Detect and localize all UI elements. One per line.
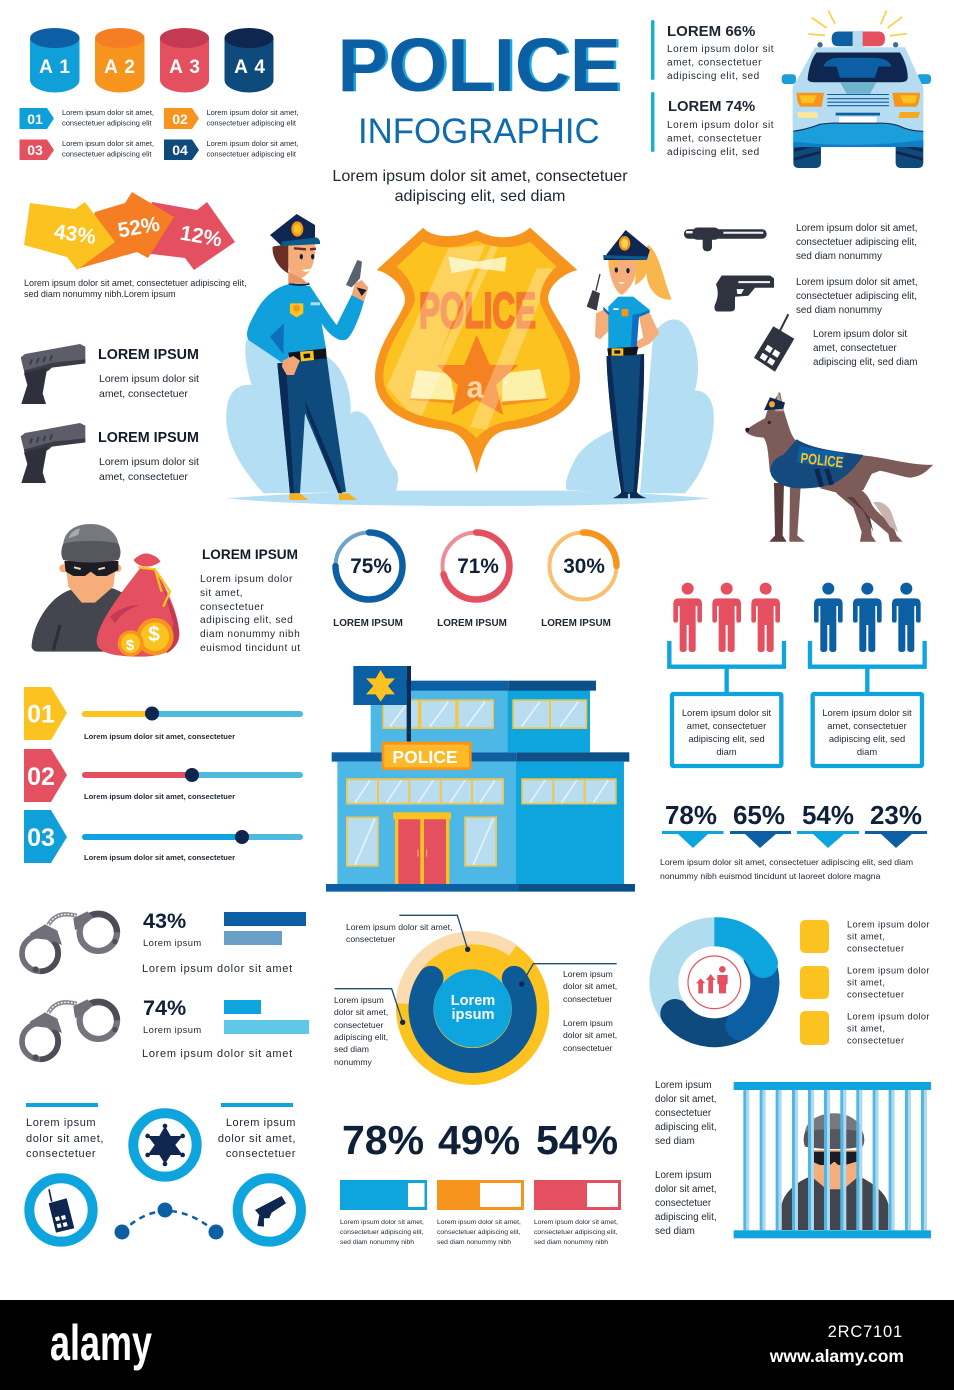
slider 02: Lorem ipsum dolor sit amet, consectetuer — [84, 792, 235, 801]
subtitle infographic: INFOGRAPHIC — [358, 112, 600, 151]
people box text: Lorem ipsum dolor sit — [822, 708, 912, 718]
jail text: consectetuer — [655, 1198, 712, 1209]
thief with money bag: $ — [126, 637, 135, 654]
ring diagram: dolor sit amet, — [563, 1030, 617, 1040]
percent bars bottom: Lorem ipsum dolor sit amet, — [340, 1219, 424, 1226]
numbered sliders — [24, 687, 303, 863]
handcuffs stats: 43% — [143, 908, 186, 933]
legend item 01: Lorem ipsum dolor sit amet, — [62, 108, 154, 117]
people groups — [669, 583, 925, 766]
ring diagram: consectetuer — [563, 994, 613, 1004]
intro text: adipiscing elit, sed diam — [395, 187, 565, 205]
icon: handcuffs 2 — [22, 999, 118, 1060]
handcuffs stats: Lorem ipsum — [143, 1024, 202, 1035]
thief with money bag — [32, 524, 179, 657]
legend item 04: 04 — [172, 142, 188, 158]
jail text: dolor sit amet, — [655, 1184, 717, 1195]
donut legend: Lorem ipsum dolor — [847, 920, 930, 930]
ring 30 percent — [541, 532, 616, 629]
arrows 43 52 12 percent — [24, 192, 235, 270]
police shield badge: a — [466, 370, 484, 404]
male officer — [247, 214, 368, 500]
icon: pistol 1 — [21, 344, 85, 404]
jail text: Lorem ipsum — [655, 1080, 712, 1091]
percent markers row: 78% — [665, 800, 717, 830]
ring diagram: ipsum — [452, 1007, 495, 1023]
icon circles with dotted path: dolor sit amet, — [218, 1133, 296, 1145]
percent markers row: 54% — [802, 800, 854, 830]
blue people — [814, 583, 921, 652]
ring 75 percent: 75% — [350, 555, 392, 578]
cylinder A4: A 4 — [234, 57, 266, 78]
jail text: sed diam — [655, 1136, 695, 1147]
donut legend: sit amet, — [847, 1024, 885, 1034]
dotted path — [114, 1202, 224, 1240]
percent bars bottom: Lorem ipsum dolor sit amet, — [437, 1219, 521, 1226]
thief text: adipiscing elit, sed — [200, 615, 293, 626]
cage bars — [734, 1082, 931, 1238]
weapon list right: Lorem ipsum dolor sit amet, — [796, 223, 917, 234]
icon: gun — [238, 1178, 301, 1242]
people box text: diam — [857, 747, 877, 757]
icon: pistol 2 — [21, 423, 85, 483]
slider 01: Lorem ipsum dolor sit amet, consectetuer — [84, 732, 235, 741]
people box text: amet, consectetuer — [827, 721, 907, 731]
percent bars bottom: consectetuer adipiscing elit, — [437, 1229, 521, 1236]
cylinder A1: A 1 — [39, 57, 71, 78]
percent bars bottom: sed diam nonummy nibh — [437, 1239, 511, 1246]
handcuffs stats: Lorem ipsum dolor sit amet — [142, 1048, 293, 1060]
ring 75 percent — [333, 532, 403, 629]
police station building — [326, 666, 635, 892]
legend item 02: 02 — [172, 111, 188, 127]
intro text — [332, 167, 628, 205]
jail text — [655, 1080, 717, 1237]
yellow arrow — [24, 202, 115, 270]
people box text: adipiscing elit, sed — [688, 734, 765, 744]
percent markers row: 23% — [870, 800, 922, 830]
icon: handcuffs 1 — [22, 911, 118, 972]
people box text: adipiscing elit, sed — [829, 734, 905, 744]
bracket and box right — [810, 641, 925, 766]
ring diagram: consectetuer — [346, 934, 396, 944]
percent markers row: Lorem ipsum dolor sit amet, consectetuer adipiscing elit, sed diam — [660, 857, 913, 867]
stats with teal bars — [651, 20, 774, 158]
icon: radio — [754, 314, 794, 372]
percent bars bottom: consectetuer adipiscing elit, — [534, 1229, 618, 1236]
red arrow — [135, 202, 235, 270]
pistol list left: amet, consectetuer — [99, 472, 188, 483]
stats with teal bars: LOREM 66% — [667, 23, 755, 40]
pistol list left: amet, consectetuer — [99, 389, 188, 400]
ring diagram: nonummy — [334, 1057, 373, 1067]
legend item 03 — [20, 139, 154, 160]
arrows 43 52 12 percent: 43% — [52, 220, 98, 249]
thief text: euismod tincidunt ut — [200, 643, 301, 654]
red people — [673, 583, 780, 652]
police car — [782, 11, 931, 168]
arrows caption — [24, 278, 247, 299]
slider 02 — [24, 749, 303, 802]
percent markers row: nonummy nibh euismod tincidunt ut laoreet dolore magna — [660, 871, 881, 881]
percent markers row: 65% — [733, 800, 785, 830]
icon: arrows and person — [696, 966, 728, 993]
handcuffs stats: Lorem ipsum — [143, 937, 202, 948]
legend item 03: consectetuer adipiscing elit — [62, 150, 152, 158]
police shield badge — [375, 228, 580, 473]
donut legend: sit amet, — [847, 978, 885, 988]
thief text: LOREM IPSUM — [202, 547, 298, 562]
ring diagram: consectetuer — [563, 1043, 613, 1053]
cylinder A2: A 2 — [104, 57, 136, 78]
stats with teal bars: adipiscing elit, sed — [667, 71, 760, 82]
icon: handgun — [714, 275, 774, 312]
donut legend: Lorem ipsum dolor — [847, 1012, 930, 1022]
icon: baton — [684, 228, 767, 251]
weapon list right: sed diam nonummy — [796, 251, 882, 262]
legend item 04 — [164, 139, 298, 160]
cylinder A4 — [224, 28, 274, 92]
slider 03 — [24, 810, 303, 863]
thief behind bars — [734, 1082, 931, 1238]
thief text: Lorem ipsum dolor — [200, 574, 293, 585]
arrows 43 52 12 percent: 12% — [178, 222, 224, 252]
ring diagram — [334, 915, 617, 1085]
stats with teal bars: adipiscing elit, sed — [667, 147, 760, 158]
pistol list left: Lorem ipsum dolor sit — [99, 374, 199, 385]
footer bar: www.alamy.com — [769, 1346, 904, 1366]
police dog — [745, 391, 933, 542]
thief text: consectetuer — [200, 602, 264, 613]
footer bar — [0, 1300, 954, 1390]
thief text: diam nonummy nibh — [200, 629, 300, 640]
stats with teal bars: amet, consectetuer — [667, 134, 762, 144]
footer bar: 2RC7101 — [828, 1323, 903, 1341]
cylinder A3 — [160, 28, 209, 92]
donut legend: Lorem ipsum dolor — [847, 966, 930, 976]
ring diagram: Lorem ipsum — [563, 969, 613, 979]
police sign text: POLICE — [392, 747, 458, 767]
progress rings — [333, 532, 616, 629]
donut chart — [664, 932, 765, 1033]
handcuffs stats: Lorem ipsum dolor sit amet — [142, 963, 293, 975]
handcuffs stats: 74% — [143, 995, 186, 1020]
donut legend: sit amet, — [847, 932, 885, 942]
slider 01: 01 — [27, 700, 55, 728]
handcuffs stats — [22, 908, 309, 1060]
stats with teal bars: Lorem ipsum dolor sit — [667, 120, 774, 131]
ring diagram: consectetuer — [334, 1020, 384, 1030]
people box text: amet, consectetuer — [687, 721, 766, 731]
ring 30 percent: 30% — [563, 555, 605, 578]
legend item 01: consectetuer adipiscing elit — [62, 118, 152, 128]
thief text: sit amet, — [200, 588, 243, 599]
thief text — [200, 547, 301, 654]
people box text: diam — [716, 747, 737, 757]
ring 75 percent: LOREM IPSUM — [333, 618, 403, 629]
ring 30 percent: LOREM IPSUM — [541, 618, 611, 629]
ring diagram: dolor sit amet, — [563, 981, 617, 991]
slider 03: Lorem ipsum dolor sit amet, consectetuer — [84, 853, 235, 862]
weapon list right — [684, 223, 918, 372]
footer bar: alamy — [50, 1315, 152, 1371]
slider 02: 02 — [27, 763, 55, 791]
pistol list left: Lorem ipsum dolor sit — [99, 457, 199, 468]
ring diagram: adipiscing elit, — [334, 1032, 388, 1042]
ring diagram: Lorem — [451, 993, 495, 1009]
percent bars bottom — [340, 1117, 621, 1246]
icon: sheriff star — [133, 1113, 197, 1177]
weapon list right: Lorem ipsum dolor sit — [813, 329, 907, 340]
clouds and ground — [226, 319, 714, 506]
ring diagram: Lorem ipsum — [334, 995, 384, 1005]
donut legend: consectetuer — [847, 990, 904, 1000]
ring diagram: sed diam — [334, 1044, 369, 1054]
ring 71 percent: LOREM IPSUM — [437, 618, 507, 629]
weapon list right: adipiscing elit, sed diam — [813, 357, 918, 368]
legend item 04: Lorem ipsum dolor sit amet, — [206, 139, 298, 148]
ring 71 percent — [437, 532, 510, 629]
numbered legend — [20, 108, 298, 160]
arrows caption: sed diam nonummy nibh.Lorem ipsum — [24, 289, 176, 299]
slider 03: 03 — [27, 824, 55, 852]
title: POLICE — [340, 23, 623, 107]
bracket and box left — [669, 641, 784, 766]
percent bars bottom: 49% — [438, 1117, 520, 1163]
icon circles with dotted path: consectetuer — [26, 1148, 96, 1160]
stats with teal bars: LOREM 74% — [668, 99, 755, 115]
legend item 02: consectetuer adipiscing elit — [206, 118, 297, 128]
weapon list right: consectetuer adipiscing elit, — [796, 237, 917, 248]
jail text: sed diam — [655, 1226, 695, 1237]
percent markers row — [660, 800, 927, 881]
cylinder row A1 to A4 — [30, 28, 274, 92]
people box text: Lorem ipsum dolor sit — [682, 708, 772, 718]
central scene: officers and badge — [226, 214, 714, 506]
ring 71 percent: 71% — [457, 555, 499, 578]
jail text: consectetuer — [655, 1108, 712, 1119]
ring diagram: Lorem ipsum dolor sit amet, — [346, 922, 452, 932]
female officer — [587, 230, 672, 498]
icon circles with dotted path: consectetuer — [226, 1148, 296, 1160]
percent bars bottom: consectetuer adipiscing elit, — [340, 1229, 424, 1236]
police shield badge: POLICE — [419, 282, 536, 338]
donut legend: consectetuer — [847, 1036, 904, 1046]
thief with money bag: $ — [148, 623, 160, 646]
jail text: adipiscing elit, — [655, 1212, 717, 1223]
legend item 03: Lorem ipsum dolor sit amet, — [62, 139, 154, 148]
weapon list right: amet, consectetuer — [813, 343, 897, 354]
orange arrow — [77, 192, 174, 269]
weapon list right: sed diam nonummy — [796, 305, 882, 316]
ring diagram: dolor sit amet, — [334, 1007, 388, 1017]
jail text: adipiscing elit, — [655, 1122, 717, 1133]
weapon list right: Lorem ipsum dolor sit amet, — [796, 277, 917, 288]
legend item 02: Lorem ipsum dolor sit amet, — [206, 108, 298, 117]
pistol list left: LOREM IPSUM — [98, 347, 199, 363]
arrows caption: Lorem ipsum dolor sit amet, consectetuer adipiscing elit, — [24, 278, 247, 288]
donut legend: consectetuer — [847, 944, 904, 954]
donut legend — [800, 920, 930, 1046]
icon: walkie talkie — [29, 1178, 93, 1242]
police dog: POLICE — [800, 450, 844, 471]
weapon list right: consectetuer adipiscing elit, — [796, 291, 917, 302]
pistol list left: LOREM IPSUM — [98, 430, 199, 446]
icon circles with dotted path: Lorem ipsum — [26, 1117, 96, 1129]
legend item 02 — [164, 108, 298, 129]
cylinder A2 — [95, 28, 144, 92]
icon circles with dotted path — [26, 1103, 301, 1242]
percent bars bottom: 54% — [536, 1117, 618, 1163]
cylinder A1 — [30, 28, 80, 92]
jail text: Lorem ipsum — [655, 1170, 712, 1181]
cylinder A3: A 3 — [169, 57, 201, 78]
legend item 01 — [20, 108, 154, 129]
arrows 43 52 12 percent: 52% — [116, 213, 162, 243]
legend item 01: 01 — [27, 111, 43, 127]
percent bars bottom: sed diam nonummy nibh — [534, 1239, 608, 1246]
people box text — [682, 708, 912, 757]
legend item 03: 03 — [27, 142, 43, 158]
icon circles with dotted path: Lorem ipsum — [226, 1117, 296, 1129]
pistol list left — [21, 344, 199, 483]
ring diagram: Lorem ipsum — [563, 1018, 613, 1028]
percent bars bottom: 78% — [342, 1117, 424, 1163]
percent bars bottom: Lorem ipsum dolor sit amet, — [534, 1219, 618, 1226]
icon circles with dotted path: dolor sit amet, — [26, 1133, 104, 1145]
legend item 04: consectetuer adipiscing elit — [206, 150, 297, 158]
title: POLICE — [338, 23, 620, 107]
slider 01 — [24, 687, 303, 741]
stats with teal bars: Lorem ipsum dolor sit — [667, 44, 774, 55]
intro text: Lorem ipsum dolor sit amet, consectetuer — [332, 167, 628, 185]
percent bars bottom: sed diam nonummy nibh — [340, 1239, 414, 1246]
jail text: dolor sit amet, — [655, 1094, 717, 1105]
stats with teal bars: amet, consectetuer — [667, 58, 762, 68]
